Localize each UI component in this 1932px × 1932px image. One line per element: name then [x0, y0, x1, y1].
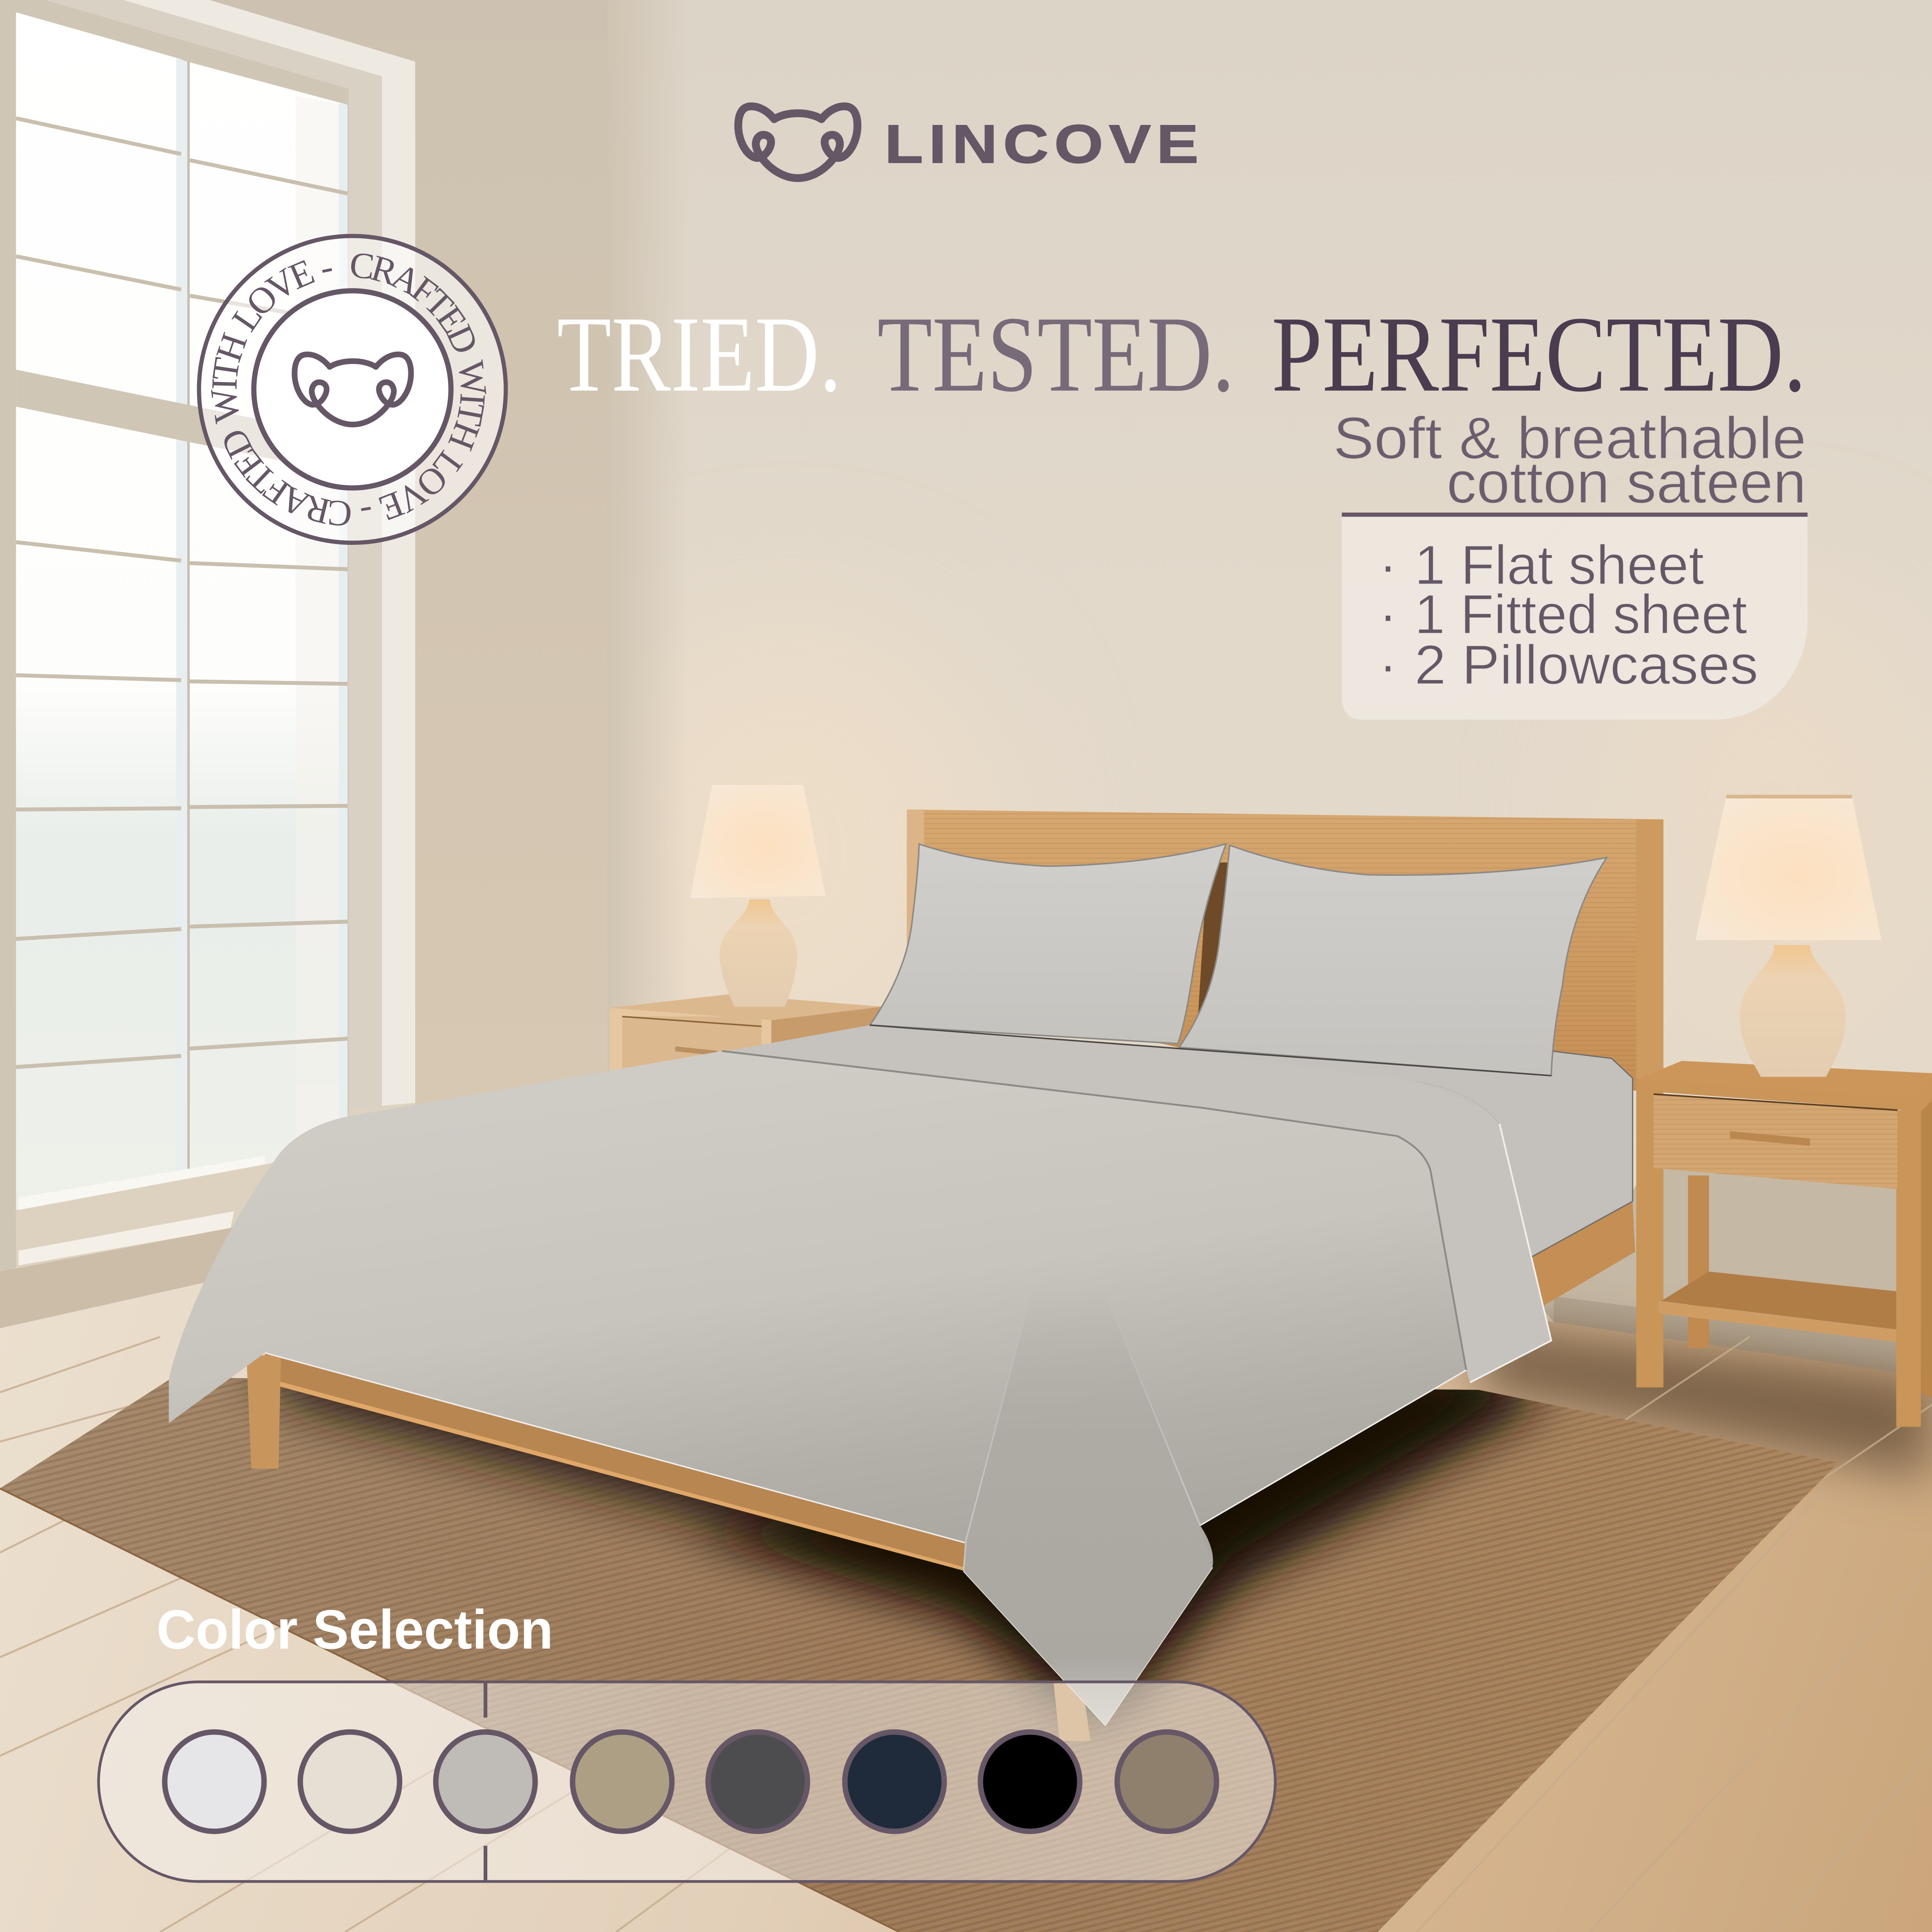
rug	[0, 1378, 1838, 1932]
drawer handle	[1730, 1131, 1810, 1146]
nightstand drawer	[1653, 1094, 1898, 1189]
lower wall behind nightstand	[1510, 1158, 1932, 1378]
swatches	[165, 1732, 1216, 1832]
nightstand top	[1636, 1061, 1932, 1098]
bed	[169, 844, 1635, 1741]
set contents list	[1379, 534, 1758, 696]
pillow right	[1179, 845, 1607, 1075]
right nightstand	[1636, 1061, 1932, 1427]
seal curved text: CRAFTED WITH LOVE - CRAFTED WITH LOVE -	[202, 244, 495, 535]
lamp shade	[690, 785, 826, 898]
floor shadow by nightstand	[1479, 1321, 1932, 1479]
set contents list: ·	[1379, 634, 1397, 696]
pillow left	[870, 844, 1226, 1044]
bed shadow on rug	[246, 1355, 1552, 1725]
window panes	[16, 12, 347, 1232]
sheet turn-down band	[727, 1025, 1551, 1382]
seal badge	[199, 236, 506, 543]
lamp shade	[1695, 796, 1881, 940]
panel: color swatches	[99, 1682, 1275, 1881]
floor	[0, 1183, 1932, 1932]
left nightstand	[610, 994, 882, 1084]
subtitle: cotton sateen	[1446, 450, 1806, 516]
set contents list: 2 Pillowcases	[1415, 634, 1758, 696]
left lamp	[690, 785, 826, 1007]
window muntins	[16, 118, 347, 1067]
left wall	[0, 0, 608, 1331]
back wall	[0, 0, 1932, 1392]
flat sheet	[169, 1051, 1466, 1725]
window	[0, 0, 415, 1331]
logo mark	[738, 106, 857, 178]
headline word: perfected: PERFECTED.	[1272, 294, 1806, 414]
fitted sheet	[1179, 1047, 1633, 1269]
headline word: tried: TRIED.	[557, 294, 841, 414]
set contents list: 1 Fitted sheet	[1415, 583, 1747, 645]
brand logo	[738, 106, 1204, 178]
headboard	[907, 810, 1663, 1091]
bed legs	[246, 1355, 281, 1469]
set contents list: 1 Flat sheet	[1415, 534, 1704, 596]
lamp base	[1740, 945, 1846, 1077]
nightstand legs	[1688, 1176, 1709, 1348]
nightstand shelf	[1661, 1272, 1896, 1330]
sheet corner drape	[963, 1288, 1212, 1725]
seal centre	[254, 291, 451, 488]
selected swatch marker	[485, 1682, 486, 1881]
subtitle: Soft & breathable	[1333, 405, 1806, 471]
panel: set contents	[1342, 513, 1807, 720]
headline word: tested: TESTED.	[877, 294, 1235, 414]
seal icon	[295, 354, 411, 425]
seal ring	[199, 236, 506, 543]
subtitle	[1333, 405, 1806, 516]
set contents list: ·	[1379, 583, 1397, 645]
set contents list: ·	[1379, 534, 1397, 596]
window sill	[18, 1211, 234, 1265]
logo wordmark: LINCOVE	[885, 113, 1204, 174]
floor planks	[0, 1337, 1932, 1932]
headline	[557, 294, 1806, 414]
color selection heading: Color Selection	[156, 1599, 553, 1661]
right lamp	[1695, 795, 1881, 1077]
bed frame rails	[1510, 1201, 1635, 1326]
lamp base	[720, 899, 797, 1007]
